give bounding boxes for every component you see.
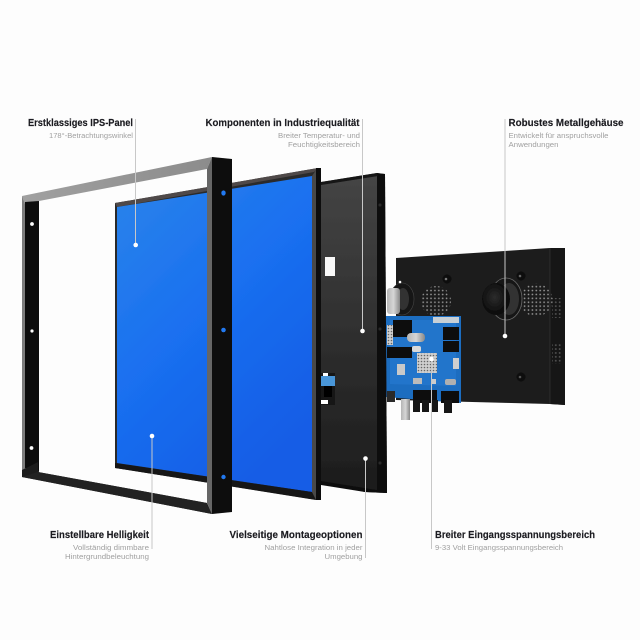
description: Vollständig dimmbare: [73, 545, 149, 552]
product: exploded monitor: [22, 157, 565, 514]
heading: Breiter Eingangsspannungsbereich: [435, 529, 595, 541]
description: 178°-Betrachtungswinkel: [49, 132, 133, 140]
heading: Erstklassiges IPS-Panel: [28, 117, 133, 129]
icon: right lens connector: [482, 278, 522, 320]
leader line: [429, 357, 434, 549]
component: IPS display panel: [115, 168, 321, 500]
icon: white frame dots: [30, 222, 34, 450]
leader line: [150, 434, 154, 549]
leader line: [133, 119, 138, 247]
description: Entwickelt für anspruchsvolle: [508, 133, 609, 140]
icon: blue frame dots: [221, 190, 226, 479]
leader line: [360, 119, 365, 333]
icon: upper cutout: [325, 257, 335, 276]
description: 9-33 Volt Eingangsspannungsbereich: [435, 545, 563, 552]
callout: Einstellbare Helligkeit: [50, 434, 154, 561]
heading: Komponenten in Industriequalität: [206, 117, 360, 129]
description: Nahtlose Integration in jeder: [264, 545, 363, 552]
component: middle housing: [321, 173, 387, 493]
callout: Robustes Metallgehäuse: [503, 117, 624, 338]
description: [508, 133, 609, 149]
component: circuit board: [386, 316, 461, 420]
heading: Robustes Metallgehäuse: [508, 117, 624, 129]
description: [264, 545, 363, 561]
callout: Komponenten in Industriequalität: [206, 117, 365, 333]
callout: Breiter Eingangsspannungsbereich: [429, 357, 595, 552]
description: Breiter Temperatur- und: [278, 133, 360, 140]
description: Anwendungen: [508, 142, 559, 149]
description: [278, 133, 360, 149]
icon: side vents: [552, 298, 561, 364]
icon: vent right: [520, 284, 552, 316]
icon: lower cutout: [321, 373, 335, 405]
callout: Erstklassiges IPS-Panel: [28, 117, 138, 247]
heading: Einstellbare Helligkeit: [50, 529, 149, 541]
leader line: [363, 456, 368, 558]
component: rear metal enclosure: [396, 248, 565, 405]
callout: Vielseitige Montageoptionen: [230, 456, 368, 561]
description: Feuchtigkeitsbereich: [288, 142, 360, 149]
icon: vent left: [421, 286, 451, 316]
component: left connector: [387, 281, 414, 315]
leader line: [503, 119, 507, 338]
description: Umgebung: [324, 554, 363, 561]
heading: Vielseitige Montageoptionen: [230, 529, 362, 541]
description: Hintergrundbeleuchtung: [65, 554, 149, 561]
description: [65, 545, 149, 561]
component: front bezel frame: [22, 157, 232, 514]
icon: housing screws: [378, 203, 382, 465]
icon: mounting screws: [442, 272, 526, 382]
